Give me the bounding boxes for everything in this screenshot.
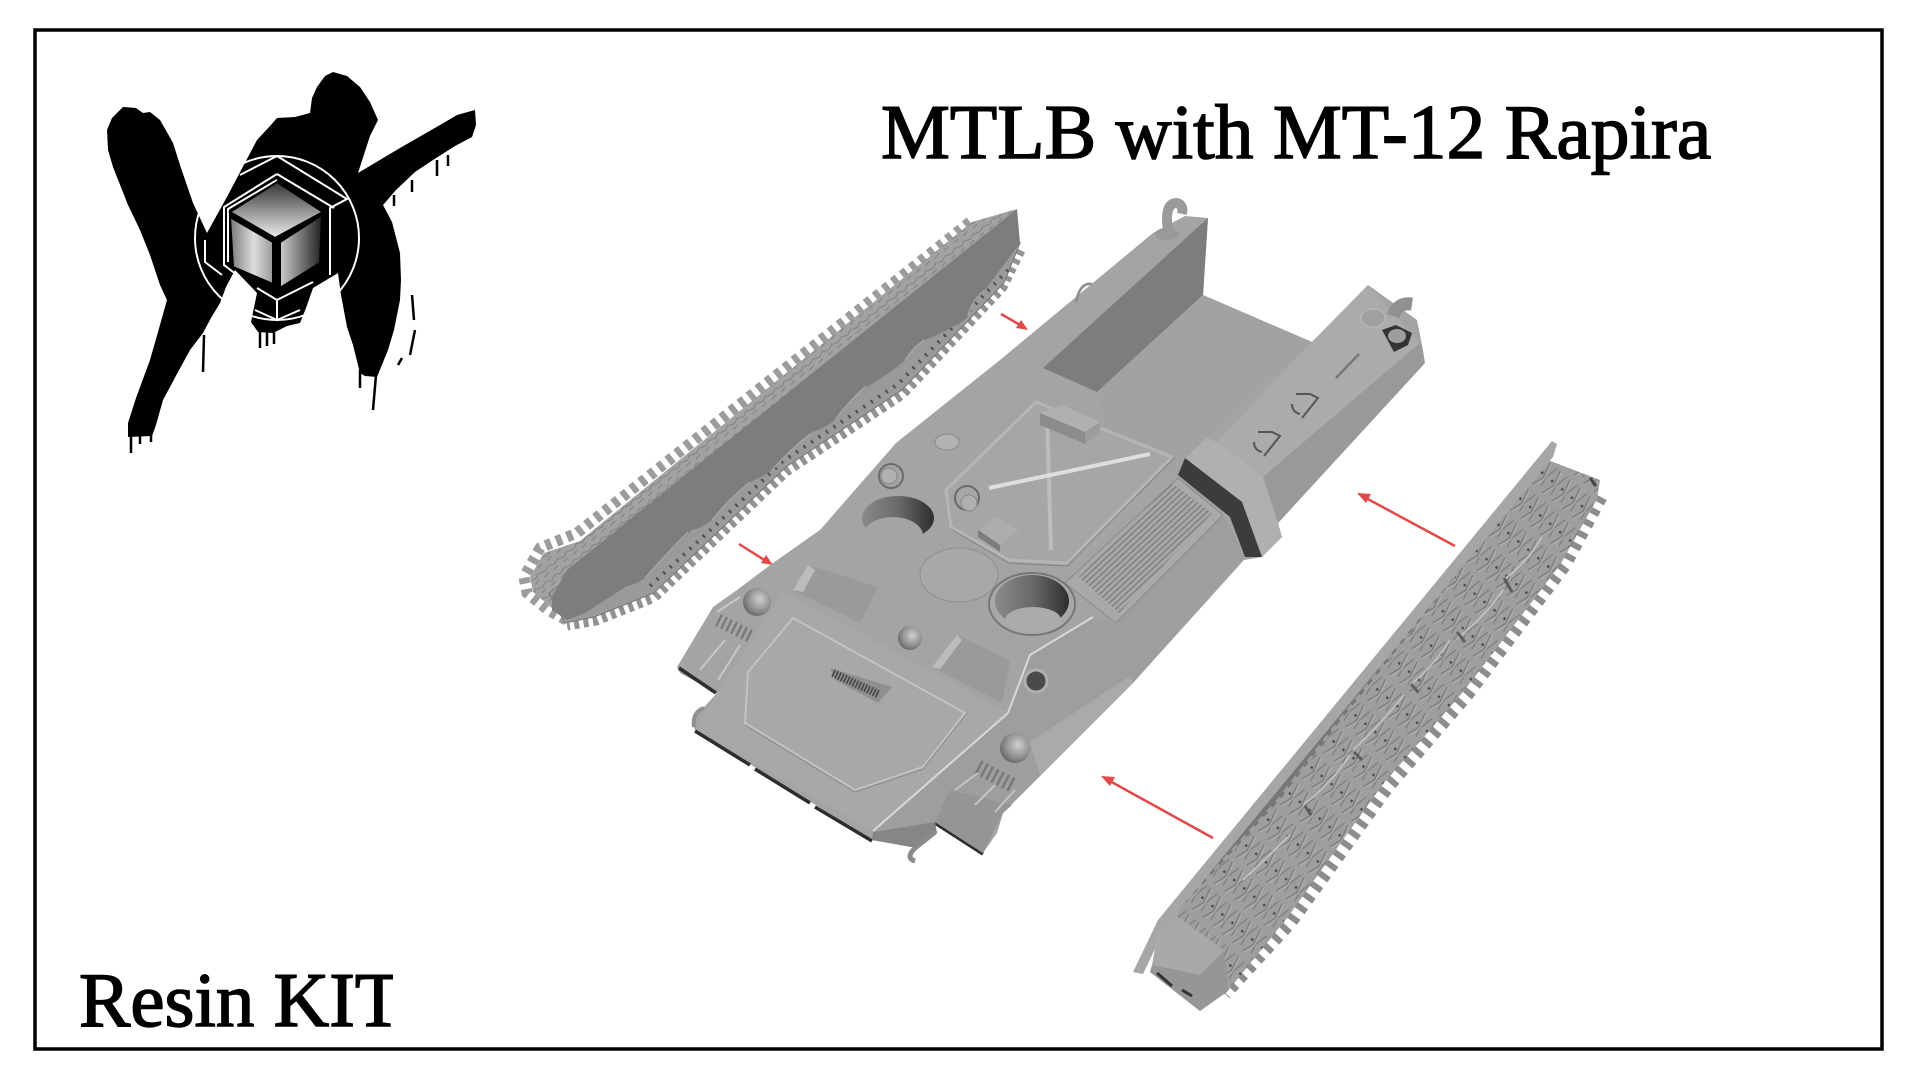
logo: shaded cube <box>230 182 323 288</box>
hull: commander hatch plate <box>946 402 1172 563</box>
hull: left headlight and guard <box>700 588 771 680</box>
hull: sponson rail <box>1030 676 1133 776</box>
left track: lower tread band <box>549 243 1020 623</box>
right track <box>1133 441 1601 1011</box>
hull: cross brace <box>989 454 1150 488</box>
hull: glacis vent <box>830 668 892 703</box>
hull: right body side <box>873 515 1245 853</box>
resin kit label: Resin KIT <box>79 957 402 1043</box>
hull: right wall side <box>1263 343 1425 523</box>
arrow: upper left track to hull <box>1001 314 1028 330</box>
hull: dome vent <box>898 626 922 650</box>
hull: left wall inner face <box>1043 218 1208 392</box>
right track: tread links <box>1150 460 1600 1011</box>
right track: light rim <box>1133 441 1557 974</box>
hull: stowage box <box>1040 405 1100 444</box>
left track: lower band pin shadows <box>650 270 1008 586</box>
left track: wheel arcs <box>645 290 985 578</box>
hull: hatch plate shadow <box>951 457 1175 566</box>
hull: right headlight and guard <box>955 733 1030 812</box>
hull: ring hatch by edge <box>879 464 903 488</box>
hull: left wall tow eye <box>1167 203 1182 230</box>
hull: front tow hook <box>694 708 704 727</box>
hull: rear sponson end <box>935 790 1012 853</box>
hull: lower clamp <box>1254 432 1280 456</box>
hull: glacis panel <box>745 618 965 790</box>
hull: large round hatch <box>920 548 998 602</box>
hull: armour collar <box>1185 438 1282 557</box>
arrow: upper right track to hull <box>1357 493 1455 546</box>
arrow: lower right track to hull <box>1101 776 1213 838</box>
hull: engine deck panel <box>1065 478 1223 623</box>
hull: dark collar band <box>1178 458 1262 557</box>
hull: silhouette <box>677 216 1425 853</box>
hull: hatch on right wall <box>1361 309 1385 327</box>
arrow: lower left track to hull <box>739 544 773 565</box>
left track: upper and end teeth <box>524 222 970 621</box>
hull: right wall lens <box>1382 325 1412 352</box>
hull: wall rod <box>1336 354 1359 378</box>
hull <box>677 203 1425 861</box>
hull: right driver hatch <box>932 635 1010 703</box>
hull: vertical brace <box>1047 413 1051 550</box>
hull: front plate seam <box>873 617 1093 831</box>
right track: wheel shadows <box>1305 578 1512 815</box>
left track: upper tread band <box>530 209 1017 622</box>
left track: side plate <box>552 209 1020 620</box>
logo: hexagon outline <box>205 156 347 320</box>
hull: bottom tow hook <box>910 832 935 861</box>
hull: left wall handle <box>1076 284 1092 302</box>
logo: brush-painted letters <box>107 72 476 437</box>
hull: round side port <box>1025 670 1047 692</box>
logo <box>107 72 476 453</box>
right track: inner saw edge <box>1178 462 1548 914</box>
hull: lower edge shadow <box>679 668 983 854</box>
hull: right wall tow eye <box>1393 304 1412 316</box>
hull: eye base <box>1155 228 1179 240</box>
right track: lower end <box>1150 915 1228 1011</box>
hull: small square hatch <box>978 517 1019 552</box>
hull: belly <box>872 822 937 848</box>
hull: engine grille <box>1079 483 1212 613</box>
logo: circle emblem <box>195 156 359 320</box>
title: MTLB with MT-12 Rapira <box>881 89 1711 175</box>
right track: upper end <box>1590 478 1596 486</box>
hull: left open turret hole <box>862 496 934 555</box>
hull: upper clamp <box>1292 394 1318 418</box>
hull: left driver hatch <box>793 565 878 623</box>
hull: cargo floor <box>1097 295 1312 475</box>
logo: paint drips <box>131 155 448 453</box>
hull: right wall top <box>1217 285 1420 477</box>
hull: glacis panel shadow <box>745 713 967 792</box>
left track: lower teeth <box>567 250 1020 625</box>
right track: road wheel arcs <box>1243 537 1542 880</box>
left track <box>524 209 1020 625</box>
hull: front plate <box>695 592 1008 831</box>
hull: ring hatch near plate <box>955 486 979 511</box>
right track: dark inner strip <box>1158 452 1553 926</box>
hull: right open turret hole <box>989 573 1075 635</box>
hull: small round port <box>935 434 959 450</box>
right track: outer teeth <box>1225 497 1601 994</box>
